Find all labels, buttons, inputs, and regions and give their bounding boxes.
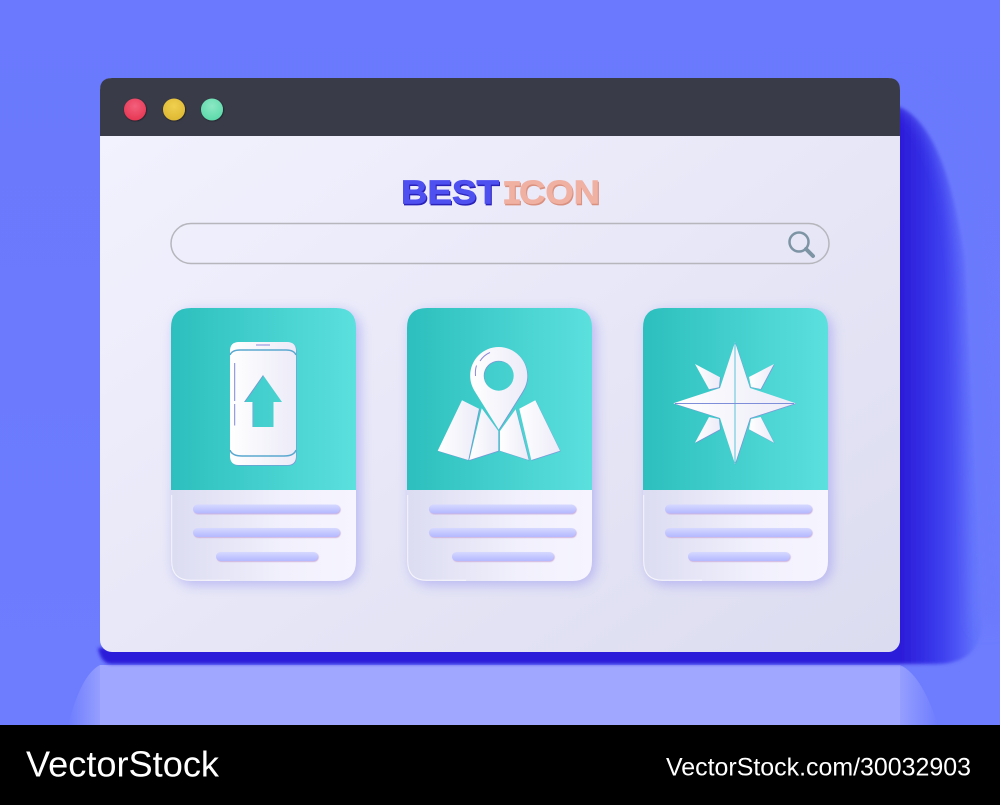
panel: card 2 map pin: [407, 308, 596, 585]
yellow button: [163, 98, 185, 120]
title bar: [100, 78, 900, 136]
text lines 3: [665, 504, 812, 561]
card 1 lower: [171, 490, 356, 581]
card 3 lower: [643, 490, 828, 581]
card 2 upper: [407, 308, 592, 490]
icon: compass rose: [673, 342, 796, 464]
icon: phone with up arrow: [230, 342, 296, 465]
logo title: I: [503, 178, 523, 215]
icon: magnifier: [790, 232, 813, 256]
icon: folded map and location pin: [438, 347, 560, 460]
search bar: [171, 224, 829, 264]
logo title: CON: [519, 174, 600, 210]
logo title: [401, 174, 601, 215]
green button: [201, 98, 223, 120]
logo title: I: [502, 176, 522, 214]
text lines 2: [429, 504, 576, 561]
window body: [100, 78, 900, 652]
footer logo: VectorStock: [26, 744, 220, 784]
logo title: CON: [520, 175, 601, 212]
red button: [124, 98, 146, 120]
card 1 upper: [171, 308, 356, 490]
browser window: [100, 78, 900, 652]
footer bar: [0, 725, 1000, 805]
logo title: BEST: [402, 175, 500, 212]
logo title: BEST: [401, 174, 499, 210]
footer id: VectorStock.com/30032903: [666, 754, 971, 782]
text lines 1: [193, 504, 340, 561]
panel: card 3 compass rose: [643, 308, 832, 585]
floor reflection: [68, 665, 938, 725]
card 3 upper: [643, 308, 828, 490]
panel: card 1 phone upload: [171, 308, 360, 585]
window shadow: [98, 90, 990, 664]
card 2 lower: [407, 490, 592, 581]
